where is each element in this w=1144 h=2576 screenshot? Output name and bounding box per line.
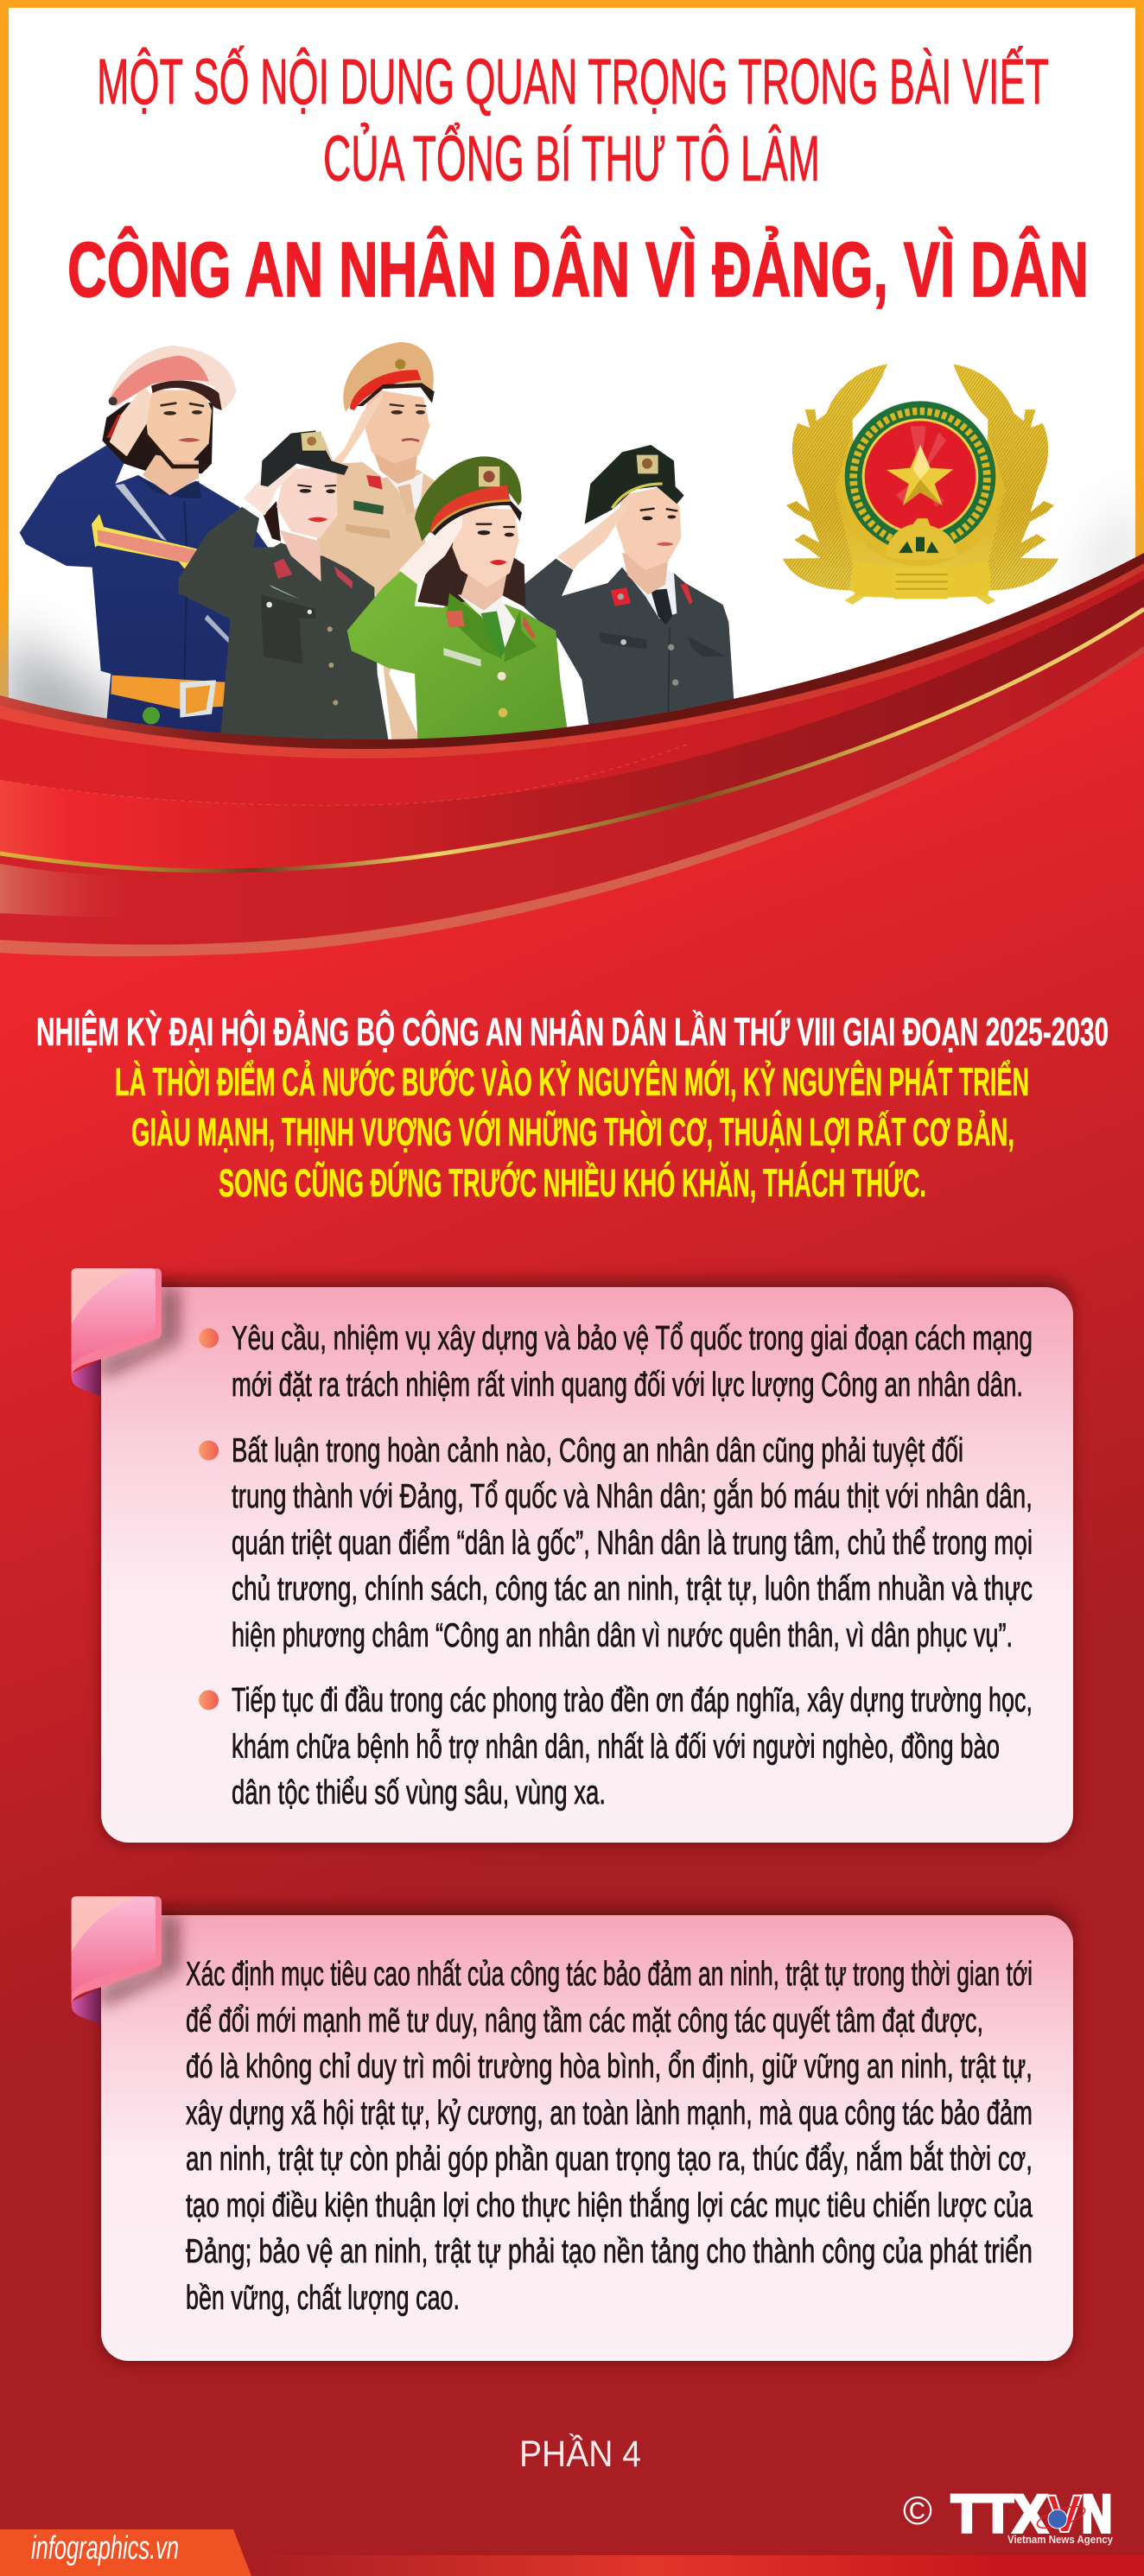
panel 1 text: dân tộc thiểu số vùng sâu, vùng xa. — [232, 1774, 606, 1811]
panel 2 text — [186, 1956, 1033, 2317]
copyright mark: © — [903, 2488, 932, 2533]
ribbon: light stripe — [0, 563, 1144, 1037]
logo letters: TTX — [951, 2484, 1047, 2543]
ribbon: band two — [0, 579, 1144, 1037]
panel 1: tasks — [72, 1268, 1073, 1844]
lower background — [0, 652, 1144, 2576]
panel 2 fold tab — [72, 1896, 177, 2025]
part label: PHẦN 4 — [519, 2433, 641, 2475]
footer strip — [246, 2555, 1144, 2576]
officer: firefighter — [20, 346, 268, 737]
panel 2: goals — [72, 1896, 1073, 2363]
panel 2 text: bền vững, chất lượng cao. — [186, 2280, 460, 2317]
officer: man in dark uniform — [524, 445, 734, 726]
website: infographics.vn — [31, 2530, 179, 2566]
officer: traffic police — [314, 342, 435, 740]
officer: woman in dark uniform — [179, 430, 389, 743]
footer tab — [0, 2529, 251, 2576]
panel 1 card — [101, 1287, 1073, 1843]
panel 1 text — [232, 1320, 1033, 1811]
panel 2 card — [101, 1915, 1073, 2361]
grey shading — [9, 492, 1135, 743]
photo: officers saluting — [20, 342, 734, 743]
agency name: Vietnam News Agency — [1007, 2533, 1114, 2546]
ribbon: dark edge — [0, 553, 1144, 1037]
logo: TTXVN: N — [1082, 2484, 1112, 2543]
logo: TTXVN: V — [1047, 2484, 1082, 2543]
title: CỦA TỔNG BÍ THƯ TÔ LÂM — [323, 123, 820, 194]
emblem medallion — [841, 401, 1000, 566]
ribbon: band three — [0, 609, 1144, 1037]
panel 1 bullets — [199, 1329, 219, 1710]
ribbon: band one — [0, 570, 1144, 1037]
officer: woman in green uniform — [347, 456, 568, 740]
ribbon: gold line — [0, 609, 1144, 871]
logo: TTXVN — [903, 2484, 1114, 2546]
ribbon: lower stripe — [0, 646, 1144, 1037]
police emblem — [783, 365, 1058, 605]
emblem cog and ribbon — [851, 518, 991, 599]
title — [67, 46, 1089, 314]
orange frame — [0, 0, 1144, 717]
panel 1 fold tab — [72, 1268, 177, 1397]
red ribbon waves — [0, 553, 1144, 2576]
emblem wreath — [783, 365, 1058, 605]
intro text — [36, 1010, 1109, 1205]
globe — [1035, 2502, 1087, 2533]
